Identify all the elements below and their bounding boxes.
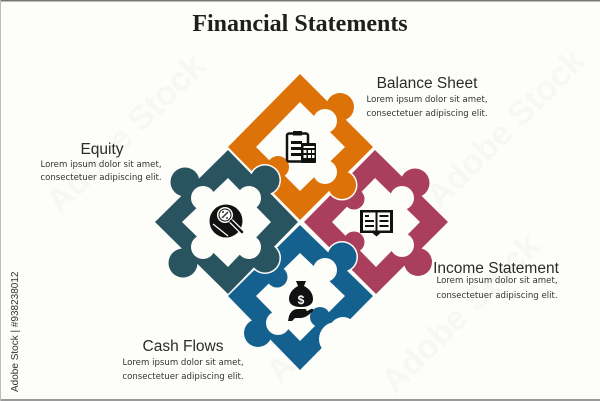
label: equity — [40, 141, 162, 183]
label: income statement: Income Statement — [433, 260, 560, 277]
icon: open book — [360, 210, 393, 236]
label: cash flows — [122, 338, 244, 382]
icon: pie chart with magnifying glass — [210, 204, 242, 238]
label: balance sheet: Lorem ipsum dolor sit amet, — [366, 95, 488, 105]
text: Adobe Stock — [374, 227, 548, 401]
label: cash flows: consectetuer adipiscing elit. — [122, 372, 244, 382]
icon: clipboard and calculator — [287, 131, 316, 163]
text: Adobe Stock — [259, 217, 433, 391]
puzzle piece: equity (teal) — [155, 150, 298, 294]
label: equity: Equity — [80, 141, 124, 158]
label: cash flows: Cash Flows — [143, 338, 224, 355]
label: income statement: consectetuer adipiscing elit. — [436, 291, 558, 301]
label: balance sheet: Balance Sheet — [377, 75, 478, 92]
text: Adobe Stock — [419, 42, 593, 216]
label: income statement — [433, 260, 560, 301]
title: Financial Statements — [192, 11, 408, 37]
icon: money bag on hand: $ — [298, 293, 305, 307]
puzzle piece: cash flows (blue) — [228, 225, 373, 370]
puzzle piece: income statement (maroon) — [304, 150, 448, 294]
puzzle piece: balance sheet (orange) — [228, 74, 373, 220]
icon: money bag on hand — [288, 281, 313, 321]
label: cash flows: Lorem ipsum dolor sit amet, — [122, 358, 244, 368]
label: income statement: Lorem ipsum dolor sit amet, — [436, 276, 558, 286]
label: balance sheet — [366, 75, 488, 119]
label: equity: consectetuer adipiscing elit. — [40, 173, 162, 183]
stock id caption: Adobe Stock | #938238012 — [10, 271, 21, 392]
text: Adobe Stock — [39, 47, 213, 221]
label: equity: Lorem ipsum dolor sit amet, — [40, 160, 162, 170]
label: balance sheet: consectetuer adipiscing elit. — [366, 109, 488, 119]
